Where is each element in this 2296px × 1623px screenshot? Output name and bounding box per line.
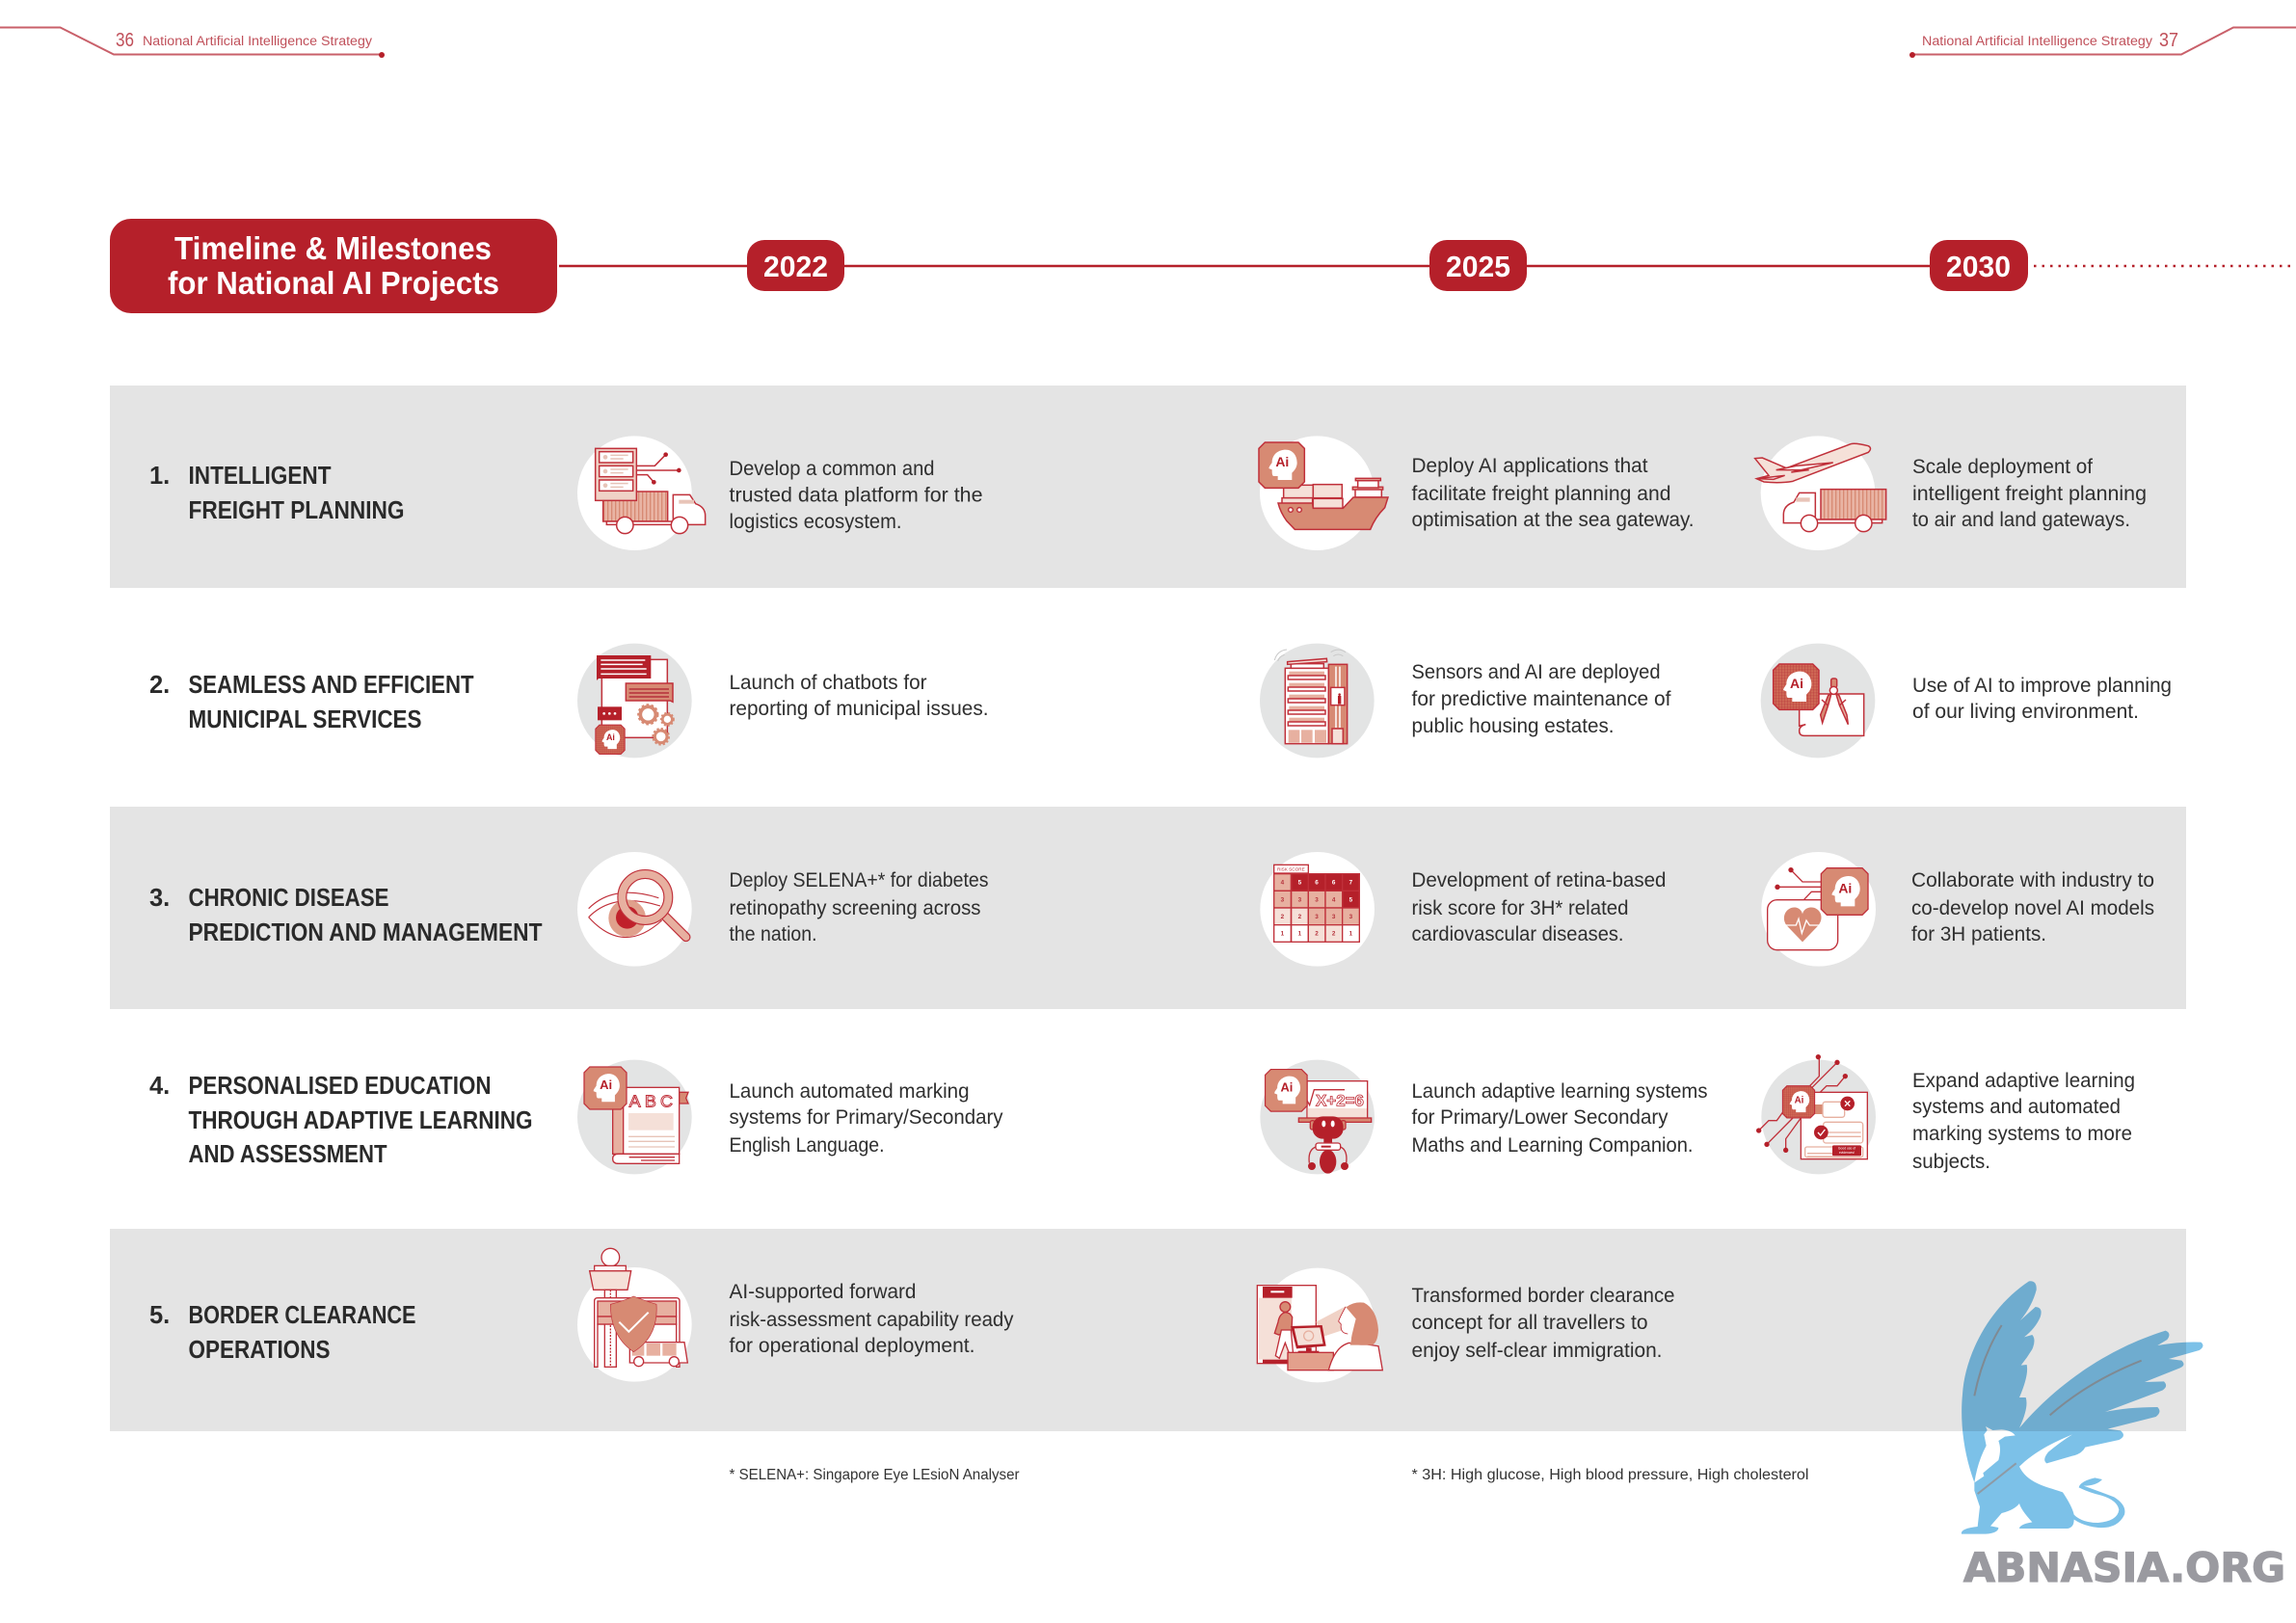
text: 2025 milestone: facilitate freight planning and: [1411, 483, 1671, 505]
row 4 heading: 4.: [149, 1073, 170, 1100]
text: 2030 milestone: [1912, 1070, 2135, 1173]
icon: risk score table: 1: [1349, 931, 1353, 938]
row 1 heading: [149, 463, 405, 524]
text: 2030 milestone: of our living environment.: [1912, 701, 2139, 723]
text: 2025 milestone: optimisation at the sea gateway.: [1411, 509, 1695, 531]
icon: risk score table: [1260, 852, 1375, 967]
text: 2022 milestone: [729, 672, 989, 720]
text: 2030 milestone: for 3H patients.: [1911, 923, 2046, 945]
text: 2030 milestone: intelligent freight planning: [1912, 483, 2147, 505]
icon: housing block: [1260, 644, 1375, 758]
text: 2025 milestone: cardiovascular diseases.: [1411, 923, 1623, 945]
year 2030: [1930, 240, 2028, 291]
icon: risk score table: 3: [1332, 914, 1336, 920]
page header: right: 37: [2159, 30, 2178, 51]
icon: planning blueprint: [1761, 644, 1875, 758]
text: 2030 milestone: Collaborate with industry to: [1911, 869, 2154, 891]
row 2 heading: [149, 672, 474, 733]
title pill: [110, 219, 557, 313]
text: 2022 milestone: for operational deployment.: [729, 1335, 975, 1357]
icon: chatbot: [577, 644, 692, 758]
row 4: personalised education: [149, 1054, 2135, 1174]
text: 2030 milestone: Expand adaptive learning: [1912, 1070, 2135, 1092]
text: 2022 milestone: [729, 869, 989, 945]
text: 2030 milestone: to air and land gateways.: [1912, 509, 2130, 531]
AI chip: Ai: [1790, 676, 1803, 691]
text: 2025 milestone: risk score for 3H* related: [1411, 897, 1629, 919]
row 4 heading: PERSONALISED EDUCATION: [189, 1073, 492, 1100]
row 3: chronic disease: [110, 807, 2186, 1009]
icon: automated marking paper: Good use of: [1838, 1147, 1855, 1151]
icon: risk score table: 2: [1315, 931, 1319, 938]
icon: risk score table: 6: [1332, 880, 1336, 887]
icon: risk score table: RISK SCORE: [1277, 867, 1305, 872]
timeline: [110, 219, 2296, 313]
text: 2022 milestone: the nation.: [729, 923, 817, 945]
text: 2022 milestone: Develop a common and: [729, 458, 935, 480]
watermark: griffin logo: [1962, 1281, 2203, 1534]
row 1: intelligent freight planning: [110, 386, 2186, 588]
year 2025: 2025: [1446, 250, 1510, 283]
text: 2025 milestone: [1411, 869, 1666, 945]
row 4 heading: AND ASSESSMENT: [189, 1141, 387, 1168]
page header: right: National Artificial Intelligence Strategy: [1922, 34, 2152, 48]
icon: risk score table: 3: [1315, 896, 1319, 903]
text: 2022 milestone: AI-supported forward: [729, 1281, 916, 1303]
icon: risk score table: 3: [1349, 914, 1353, 920]
page header: left: National Artificial Intelligence Strategy: [143, 34, 372, 48]
text: 2022 milestone: Launch of chatbots for: [729, 672, 927, 694]
icon: risk score table: 3: [1298, 896, 1302, 903]
text: 2030 milestone: marking systems to more: [1912, 1123, 2132, 1145]
icon: risk score table: 6: [1315, 880, 1319, 887]
row 5 heading: [149, 1302, 416, 1364]
text: 2025 milestone: Launch adaptive learning systems: [1411, 1080, 1708, 1103]
text: 2025 milestone: Maths and Learning Companion.: [1411, 1134, 1693, 1157]
text: 2022 milestone: trusted data platform for the: [729, 484, 983, 507]
text: 2022 milestone: Deploy SELENA+* for diabetes: [729, 869, 989, 891]
row 4 heading: [149, 1073, 532, 1168]
text: 2030 milestone: Use of AI to improve planning: [1912, 675, 2172, 697]
title pill: for National AI Projects: [168, 265, 499, 301]
footnote: 3H: * 3H: High glucose, High blood pressure, High cholesterol: [1411, 1467, 1808, 1483]
year 2022: [747, 240, 844, 291]
icon: risk score table: 4: [1281, 880, 1285, 887]
row 5 heading: OPERATIONS: [189, 1337, 330, 1364]
row 2: municipal services: [149, 644, 2172, 758]
text: 2022 milestone: systems for Primary/Secondary: [729, 1106, 1003, 1129]
text: 2022 milestone: [729, 1080, 1003, 1157]
AI chip: Ai: [1795, 1095, 1804, 1105]
text: 2025 milestone: [1411, 455, 1695, 531]
row 3 heading: [149, 885, 543, 946]
text: 2025 milestone: Transformed border clearance: [1411, 1285, 1675, 1307]
text: 2022 milestone: [729, 1281, 1014, 1357]
text: 2025 milestone: Sensors and AI are deployed: [1411, 661, 1660, 683]
text: 2030 milestone: [1911, 869, 2154, 945]
text: 2022 milestone: Launch automated marking: [729, 1080, 970, 1103]
AI chip: Ai: [1838, 880, 1852, 895]
text: 2025 milestone: public housing estates.: [1411, 715, 1614, 737]
year 2025: [1429, 240, 1527, 291]
icon: risk score table: 2: [1281, 914, 1285, 920]
row 2 heading: 2.: [149, 672, 170, 699]
text: 2022 milestone: retinopathy screening across: [729, 897, 981, 919]
AI chip: Ai: [600, 1078, 612, 1092]
text: 2025 milestone: concept for all travellers to: [1411, 1312, 1648, 1334]
AI chip: Ai: [606, 732, 615, 742]
text: 2030 milestone: subjects.: [1912, 1151, 1990, 1173]
text: 2022 milestone: risk-assessment capability ready: [729, 1309, 1014, 1331]
row 2 heading: SEAMLESS AND EFFICIENT: [189, 672, 474, 699]
icon: robot at maths board: [1260, 1060, 1375, 1174]
icon: eye and magnifier: [577, 852, 692, 967]
icon: risk score table: 7: [1349, 880, 1353, 887]
text: 2030 milestone: [1912, 456, 2147, 531]
page header: left: [0, 27, 385, 58]
icon: risk score table: 1: [1298, 931, 1302, 938]
icon: English book: [577, 1060, 692, 1174]
text: 2025 milestone: [1411, 661, 1671, 737]
AI chip: Ai: [1281, 1080, 1293, 1095]
text: 2025 milestone: for predictive maintenance of: [1411, 688, 1671, 710]
row 5 heading: 5.: [149, 1302, 170, 1329]
text: 2025 milestone: enjoy self-clear immigration.: [1411, 1340, 1662, 1362]
text: 2025 milestone: [1411, 1285, 1675, 1362]
icon: risk score table: 3: [1281, 896, 1285, 903]
page header: left: 36: [116, 30, 134, 51]
icon: risk score table: 3: [1315, 914, 1319, 920]
icon: robot at maths board: X+2=6: [1316, 1091, 1364, 1109]
icon: truck with data server: [577, 436, 706, 550]
icon: risk score table: 4: [1332, 896, 1336, 903]
text: 2022 milestone: [729, 458, 983, 533]
row 4 heading: THROUGH ADAPTIVE LEARNING: [189, 1107, 532, 1134]
text: 2022 milestone: English Language.: [729, 1134, 885, 1157]
icon: heart and AI: [1761, 852, 1876, 967]
icon: risk score table: 5: [1298, 880, 1302, 887]
text: 2025 milestone: Deploy AI applications that: [1411, 455, 1648, 477]
text: 2030 milestone: Scale deployment of: [1912, 456, 2093, 478]
icon: control tower, bus and shield: [577, 1248, 692, 1382]
watermark: ABNASIA.ORG: ABNASIA.ORG: [1963, 1544, 2285, 1591]
page header: right: [1909, 27, 2296, 58]
icon: risk score table: 5: [1349, 896, 1353, 903]
row 3 heading: CHRONIC DISEASE: [189, 885, 389, 912]
row 3 heading: 3.: [149, 885, 170, 912]
text: 2025 milestone: [1411, 1080, 1708, 1157]
icon: self-clear immigration: [1257, 1268, 1382, 1382]
row 3 heading: PREDICTION AND MANAGEMENT: [189, 919, 543, 946]
row 1 heading: 1.: [149, 463, 170, 490]
icon: risk score table: 2: [1332, 931, 1336, 938]
robot: [1308, 1116, 1348, 1174]
text: 2030 milestone: [1912, 675, 2172, 723]
icon: risk score table: 1: [1281, 931, 1285, 938]
title pill: Timeline & Milestones: [174, 230, 492, 266]
row 1 heading: FREIGHT PLANNING: [189, 497, 405, 524]
text: 2022 milestone: logistics ecosystem.: [729, 511, 902, 533]
row 5 heading: BORDER CLEARANCE: [189, 1302, 416, 1329]
text: 2030 milestone: systems and automated: [1912, 1096, 2121, 1118]
row 2 heading: MUNICIPAL SERVICES: [189, 706, 422, 733]
AI chip: Ai: [1275, 454, 1289, 469]
icon: English book: ABC: [629, 1092, 673, 1111]
year 2030: 2030: [1946, 250, 2011, 283]
text: 2030 milestone: co-develop novel AI models: [1911, 897, 2154, 919]
icon: automated marking paper: evidences!: [1839, 1151, 1855, 1155]
year 2022: 2022: [763, 250, 828, 283]
icon: plane and truck: [1755, 436, 1886, 550]
icon: risk score table: 2: [1298, 914, 1302, 920]
footnote: SELENA+: * SELENA+: Singapore Eye LEsioN Analyser: [729, 1467, 1020, 1483]
text: 2025 milestone: Development of retina-based: [1411, 869, 1666, 891]
text: 2022 milestone: reporting of municipal issues.: [729, 698, 989, 720]
icon: automated marking paper: [1756, 1054, 1876, 1174]
row 1 heading: INTELLIGENT: [189, 463, 332, 490]
text: 2025 milestone: for Primary/Lower Secondary: [1411, 1106, 1669, 1129]
row 5: border clearance: [110, 1229, 2186, 1431]
icon: cargo ship with AI chip: [1259, 436, 1388, 550]
